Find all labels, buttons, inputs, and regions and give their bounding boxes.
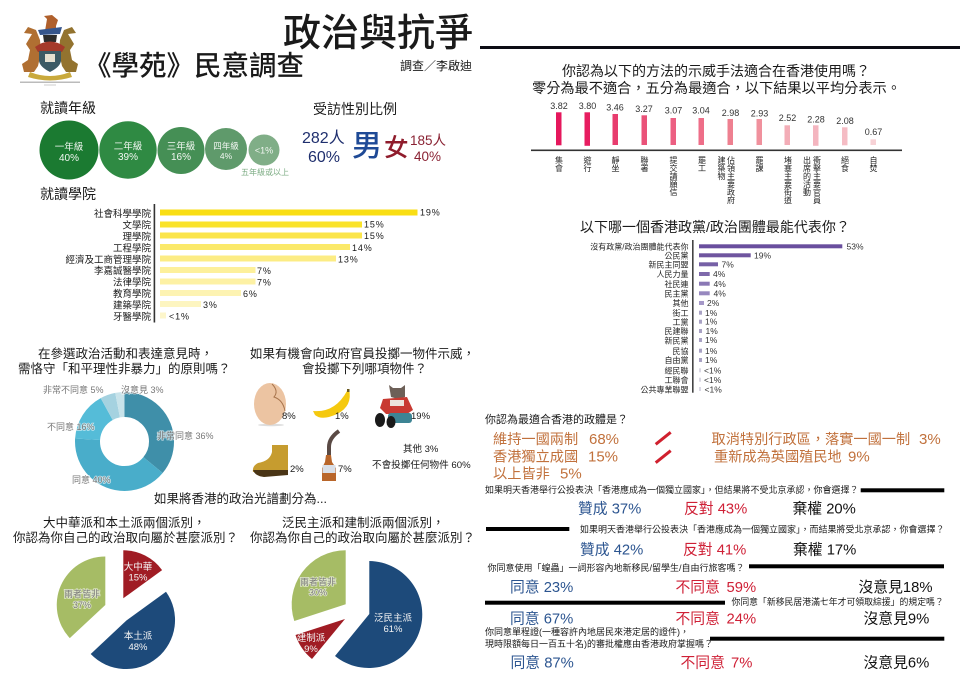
- question text: 如果明天香港舉行公投表決「香港應成為一個獨立國家」，而結果將受北京承認，你會選擇？: [580, 524, 945, 534]
- results: [510, 654, 929, 672]
- faculty labels: [65, 208, 151, 323]
- heading: faculty: 就讀學院: [40, 186, 96, 202]
- results: 同意 67%: [510, 610, 573, 628]
- option: one country two systems: 68%: [589, 431, 619, 448]
- bubble: year one: 一年級: [55, 141, 84, 153]
- icon: university crest: [20, 15, 80, 86]
- slice: neither: 兩者皆非: [64, 588, 100, 599]
- object percentages: 1%: [335, 411, 349, 422]
- faculty values: [169, 208, 441, 322]
- column labels: 聯署: [640, 155, 649, 173]
- icon: molotov bottle: [322, 431, 339, 481]
- column labels: 遊行: [583, 155, 592, 173]
- bubble: year one: 40%: [59, 153, 79, 164]
- male count: 60%: [308, 149, 340, 166]
- caption: year five or above: 五年級或以上: [241, 167, 289, 177]
- faculty values: 15%: [364, 231, 385, 241]
- axis: [154, 204, 155, 322]
- column values: 2.98: [722, 108, 739, 118]
- slice: greater China: 大中華: [124, 561, 153, 573]
- column values: [550, 101, 882, 137]
- option: independence: 香港獨立成國: [493, 449, 578, 465]
- panel: objects to throw: [250, 346, 475, 481]
- question text: 如果明天香港舉行公投表決「香港應成為一個獨立國家」，但結果將不受北京承認，你會選擇？: [485, 484, 859, 495]
- heading: protest methods: 你認為以下的方法的示威手法適合在香港使用嗎？: [562, 63, 870, 79]
- rule: [486, 527, 569, 531]
- rule: [485, 601, 725, 605]
- column values: 2.08: [836, 116, 854, 126]
- party values: 53%: [846, 242, 864, 252]
- axis: [692, 240, 694, 393]
- heading: objects question: [250, 346, 475, 376]
- column values: 2.52: [779, 113, 796, 123]
- heading: party question: 以下哪一個香港政黨/政治團體最能代表你？: [580, 219, 850, 235]
- icon: boot: [253, 445, 288, 477]
- party values: 4%: [713, 269, 726, 279]
- results: [580, 540, 856, 558]
- faculty labels: 工程學院: [113, 242, 151, 254]
- donut chart: [88, 404, 162, 478]
- faculty values: 7%: [257, 266, 272, 276]
- option: abolish SAR: 取消特別行政區，落實一國一制: [712, 432, 910, 448]
- results: 棄權 17%: [793, 540, 856, 558]
- option: British colony: 重新成為英國殖民地: [714, 449, 842, 465]
- party labels: 社民連: [664, 279, 688, 289]
- byline: 調查／李啟迪: [400, 59, 472, 73]
- results: 同意 87%: [510, 654, 574, 672]
- bubble: year one: [40, 120, 98, 180]
- slice: localist: 本土派: [124, 630, 153, 642]
- faculty values: <1%: [169, 312, 190, 322]
- results: 沒意見6%: [864, 654, 929, 672]
- panel: localist pie: [13, 515, 238, 669]
- column values: 3.07: [665, 106, 682, 116]
- donut labels: [43, 384, 214, 485]
- column labels: 出席的活動: [802, 155, 812, 197]
- slice: neither: [292, 550, 346, 621]
- slice: pro-establishment: 9%: [304, 644, 318, 655]
- faculty labels: 牙醫學院: [113, 311, 151, 323]
- heading: non-violence question: 需恪守「和平理性非暴力」的原則嗎？: [18, 361, 231, 376]
- female count: 40%: [414, 149, 441, 164]
- party labels: 新民黨: [664, 336, 688, 346]
- column labels: 絕食: [840, 155, 850, 173]
- bubble: year two: [99, 121, 157, 179]
- slice: neither: 30%: [309, 588, 327, 598]
- male count: [302, 129, 345, 166]
- option: British colony: 9%: [848, 448, 870, 465]
- object percentages: 不會投擲任何物件 60%: [372, 459, 471, 471]
- heading: localist question: 你認為你自己的政治取向屬於甚麼派別？: [13, 530, 238, 545]
- column values: 3.04: [692, 106, 710, 116]
- party values: 1%: [705, 308, 718, 318]
- heading: pan-democrat question: 泛民主派和建制派兩個派別，: [282, 516, 445, 530]
- faculty labels: 建築學院: [113, 300, 151, 312]
- header rule: [480, 46, 960, 49]
- bubble: year two: 39%: [118, 152, 138, 163]
- slice: greater China: [123, 550, 162, 598]
- heading: objects question: 會投擲下列哪項物件？: [302, 361, 427, 376]
- faculty labels: 經濟及工商管理學院: [65, 254, 151, 266]
- slice: localist: [91, 592, 175, 669]
- heading: political spectrum: 如果將香港的政治光譜劃分為...: [154, 491, 327, 506]
- faculty labels: 教育學院: [113, 288, 151, 300]
- party values: 4%: [714, 279, 726, 289]
- male glyph: 男: [352, 130, 382, 163]
- results: 沒意見9%: [864, 610, 929, 628]
- results: 沒意見18%: [858, 578, 933, 596]
- column labels: 衝擊主要官員: [812, 155, 822, 205]
- title: 政治與抗爭: [283, 13, 473, 55]
- party bars: [699, 244, 842, 391]
- slice: neither: 兩者皆非: [300, 576, 336, 587]
- option: abolish SAR: 3%: [919, 431, 941, 448]
- panel: one-way permit question: [485, 626, 944, 672]
- results: 棄權 20%: [792, 500, 856, 518]
- faculty values: 19%: [420, 208, 441, 218]
- faculty labels: 法律學院: [113, 276, 151, 288]
- party values: 19%: [754, 250, 771, 260]
- bubble: year three: [158, 127, 204, 174]
- faculty labels: 社會科學學院: [94, 208, 151, 220]
- party labels: 新民主同盟: [648, 260, 688, 270]
- subtitle: 《學苑》民意調查: [84, 50, 304, 81]
- party labels: 民建聯: [664, 326, 688, 336]
- faculty labels: 李嘉誠醫學院: [94, 265, 151, 277]
- panel: welfare residency question: [485, 596, 944, 628]
- party values: 4%: [714, 288, 726, 298]
- results: 不同意: [676, 612, 720, 628]
- party values: 1%: [705, 335, 718, 345]
- column labels: 堵塞主要街道: [784, 155, 792, 205]
- panel: preferred political system: [485, 412, 941, 482]
- heading: localist question: [13, 515, 238, 545]
- object percentages: 2%: [290, 464, 304, 475]
- panel: locust term question: [488, 562, 944, 596]
- column labels: 罷工: [698, 156, 706, 172]
- bubble: year two: 二年級: [114, 140, 143, 152]
- party values: <1%: [704, 375, 722, 385]
- slice: pro-establishment: [296, 619, 345, 659]
- question text: 你同意「新移民居港滿七年才可領取綜援」的規定嗎？: [732, 596, 944, 607]
- slice: pan-democrat: 61%: [383, 624, 403, 635]
- slice: pro-establishment: 建制派: [297, 632, 326, 644]
- bubble: year five or above: <1%: [255, 146, 273, 156]
- rule: [749, 564, 944, 568]
- object percentages: [282, 411, 471, 475]
- party labels: 民協: [672, 346, 688, 356]
- donut labels: 非常同意 36%: [157, 430, 214, 441]
- female count: [410, 133, 447, 164]
- faculty values: 6%: [243, 289, 258, 299]
- heading: objects question: 如果有機會向政府官員投擲一物件示威，: [250, 346, 475, 361]
- column values: 3.80: [579, 101, 596, 111]
- axis: [531, 150, 902, 151]
- panel: gender ratio: [302, 101, 447, 166]
- party values: 1%: [705, 355, 718, 365]
- column values: 3.27: [635, 104, 653, 114]
- party labels: 人民力量: [656, 269, 688, 279]
- question text: 你同意使用「蝗蟲」一詞形容內地新移民/留學生/自由行旅客嗎？: [488, 562, 745, 573]
- party labels: 公民黨: [664, 250, 688, 260]
- slice: localist: 48%: [128, 642, 148, 653]
- results: 不同意: [680, 656, 725, 672]
- party labels: 工聯會: [664, 375, 688, 385]
- donut labels: 同意 40%: [72, 474, 111, 485]
- faculty values: 15%: [364, 220, 385, 230]
- heading: localist question: 大中華派和本土派兩個派別，: [43, 515, 206, 530]
- slice: neither: [57, 556, 105, 638]
- panel: pan-democrat pie: [250, 516, 475, 668]
- question text: 你同意單程證(一種容許內地居民來港定居的證件)，: [485, 626, 689, 637]
- faculty labels: 文學院: [122, 220, 151, 232]
- rule: [710, 637, 944, 641]
- donut labels: 不同意 16%: [47, 421, 95, 432]
- donut labels: 沒意見 3%: [121, 384, 164, 395]
- heading: non-violence question: [18, 346, 231, 376]
- party values: <1%: [704, 384, 722, 394]
- results: 贊成 42%: [580, 542, 643, 558]
- faculty values: 3%: [203, 300, 218, 310]
- column labels: 建築物: [717, 155, 726, 181]
- column values: 2.28: [807, 114, 825, 124]
- panel: protest methods chart: [531, 63, 902, 205]
- results: 贊成 37%: [578, 500, 641, 518]
- party labels: 自由黨: [664, 355, 688, 365]
- results: 反對 41%: [683, 542, 746, 558]
- icon: stuffed wolf toy: [375, 385, 413, 428]
- red slash dividers: [656, 432, 671, 463]
- results: 同意 23%: [510, 578, 573, 596]
- party values: [704, 242, 864, 394]
- results: [510, 578, 933, 596]
- column labels: 靜坐: [611, 155, 620, 172]
- panel: non-violence donut: [18, 346, 231, 485]
- icon: egg: [254, 383, 286, 426]
- party labels: [590, 242, 688, 394]
- question text: 現時限額每日一百五十名)的審批權應由香港政府掌握嗎？: [485, 638, 713, 649]
- panel: faculty bar chart: [40, 186, 441, 323]
- column values: 2.93: [751, 108, 768, 118]
- option: none of the above: 5%: [560, 466, 582, 482]
- question text: [485, 626, 713, 649]
- option: one country two systems: 維持一國兩制: [493, 432, 578, 448]
- faculty values: 14%: [352, 243, 373, 253]
- panel: year of study: [40, 100, 289, 180]
- object percentages: 其他 3%: [403, 443, 439, 455]
- option: independence: 15%: [588, 448, 618, 465]
- panel: referendum with Beijing recognition: [486, 524, 945, 558]
- results: 24%: [726, 612, 756, 628]
- bubble: year five or above: [248, 134, 280, 166]
- faculty values: 7%: [257, 278, 272, 288]
- party values: 1%: [705, 316, 718, 326]
- bubble: year four: 四年級: [213, 141, 239, 151]
- party values: 2%: [707, 298, 720, 308]
- female glyph: 女: [384, 134, 408, 162]
- heading: protest methods: 零分為最不適合，五分為最適合，以下結果以平均分表示。: [532, 80, 901, 97]
- results: 反對 43%: [684, 500, 747, 518]
- faculty values: 13%: [338, 254, 359, 264]
- bubble: year three: 三年級: [167, 140, 196, 152]
- rule: [861, 488, 944, 492]
- party labels: 民主黨: [664, 288, 688, 298]
- results: 59%: [726, 580, 756, 596]
- column values: 0.67: [865, 127, 882, 137]
- results: 7%: [731, 656, 752, 672]
- column labels: [554, 155, 878, 205]
- heading: pan-democrat question: 你認為你自己的政治取向屬於甚麼派別？: [250, 530, 475, 545]
- party labels: 經民聯: [664, 366, 688, 376]
- party labels: 其他: [672, 298, 688, 308]
- heading: non-violence question: 在參選政治活動和表達意見時，: [38, 346, 213, 361]
- heading: gender ratio: 受訪性別比例: [313, 101, 397, 117]
- results: [510, 610, 929, 628]
- column values: 3.82: [550, 101, 568, 111]
- option: none of the above: 以上皆非: [493, 466, 550, 482]
- bars: [160, 210, 418, 318]
- column labels: 佔領主要政府: [726, 155, 736, 205]
- panel: party representation chart: [580, 219, 864, 394]
- party values: <1%: [704, 366, 722, 376]
- slice: greater China: 15%: [128, 572, 148, 584]
- object percentages: 7%: [338, 464, 352, 475]
- female count: 185人: [410, 133, 447, 148]
- column bars: [556, 112, 876, 146]
- icon: banana: [313, 389, 350, 418]
- party values: 1%: [705, 346, 718, 356]
- object percentages: 19%: [411, 411, 431, 422]
- party labels: 街工: [672, 308, 688, 318]
- party labels: 工黨: [672, 317, 688, 327]
- slice: pan-democrat: [335, 561, 422, 668]
- column labels: 提交請願信: [669, 155, 678, 197]
- party labels: 公共專業聯盟: [640, 384, 688, 394]
- donut labels: 非常不同意 5%: [43, 384, 104, 395]
- panel: referendum without Beijing recognition: [485, 484, 944, 518]
- bubble: year four: [205, 128, 247, 170]
- heading: protest methods: [532, 63, 901, 97]
- column labels: 罷課: [755, 156, 764, 173]
- party values: 1%: [706, 326, 718, 336]
- party values: 7%: [722, 260, 734, 270]
- results: 不同意: [676, 580, 720, 596]
- heading: year of study: 就讀年級: [40, 100, 96, 116]
- party labels: 沒有政黨/政治團體能代表你: [590, 242, 688, 252]
- bubble: year four: 4%: [220, 151, 233, 161]
- bubble: year three: 16%: [171, 152, 191, 163]
- column labels: 集會: [554, 155, 564, 173]
- slice: pan-democrat: 泛民主派: [374, 612, 412, 624]
- column values: 3.46: [606, 102, 624, 112]
- male count: 282人: [302, 129, 345, 147]
- faculty labels: 理學院: [122, 231, 151, 243]
- results: [578, 500, 856, 518]
- object percentages: 8%: [282, 411, 296, 422]
- slice: neither: 37%: [73, 600, 91, 610]
- column labels: 自焚: [869, 155, 878, 173]
- heading: political system question: 你認為最適合香港的政體是？: [485, 412, 628, 426]
- heading: pan-democrat question: [250, 516, 475, 545]
